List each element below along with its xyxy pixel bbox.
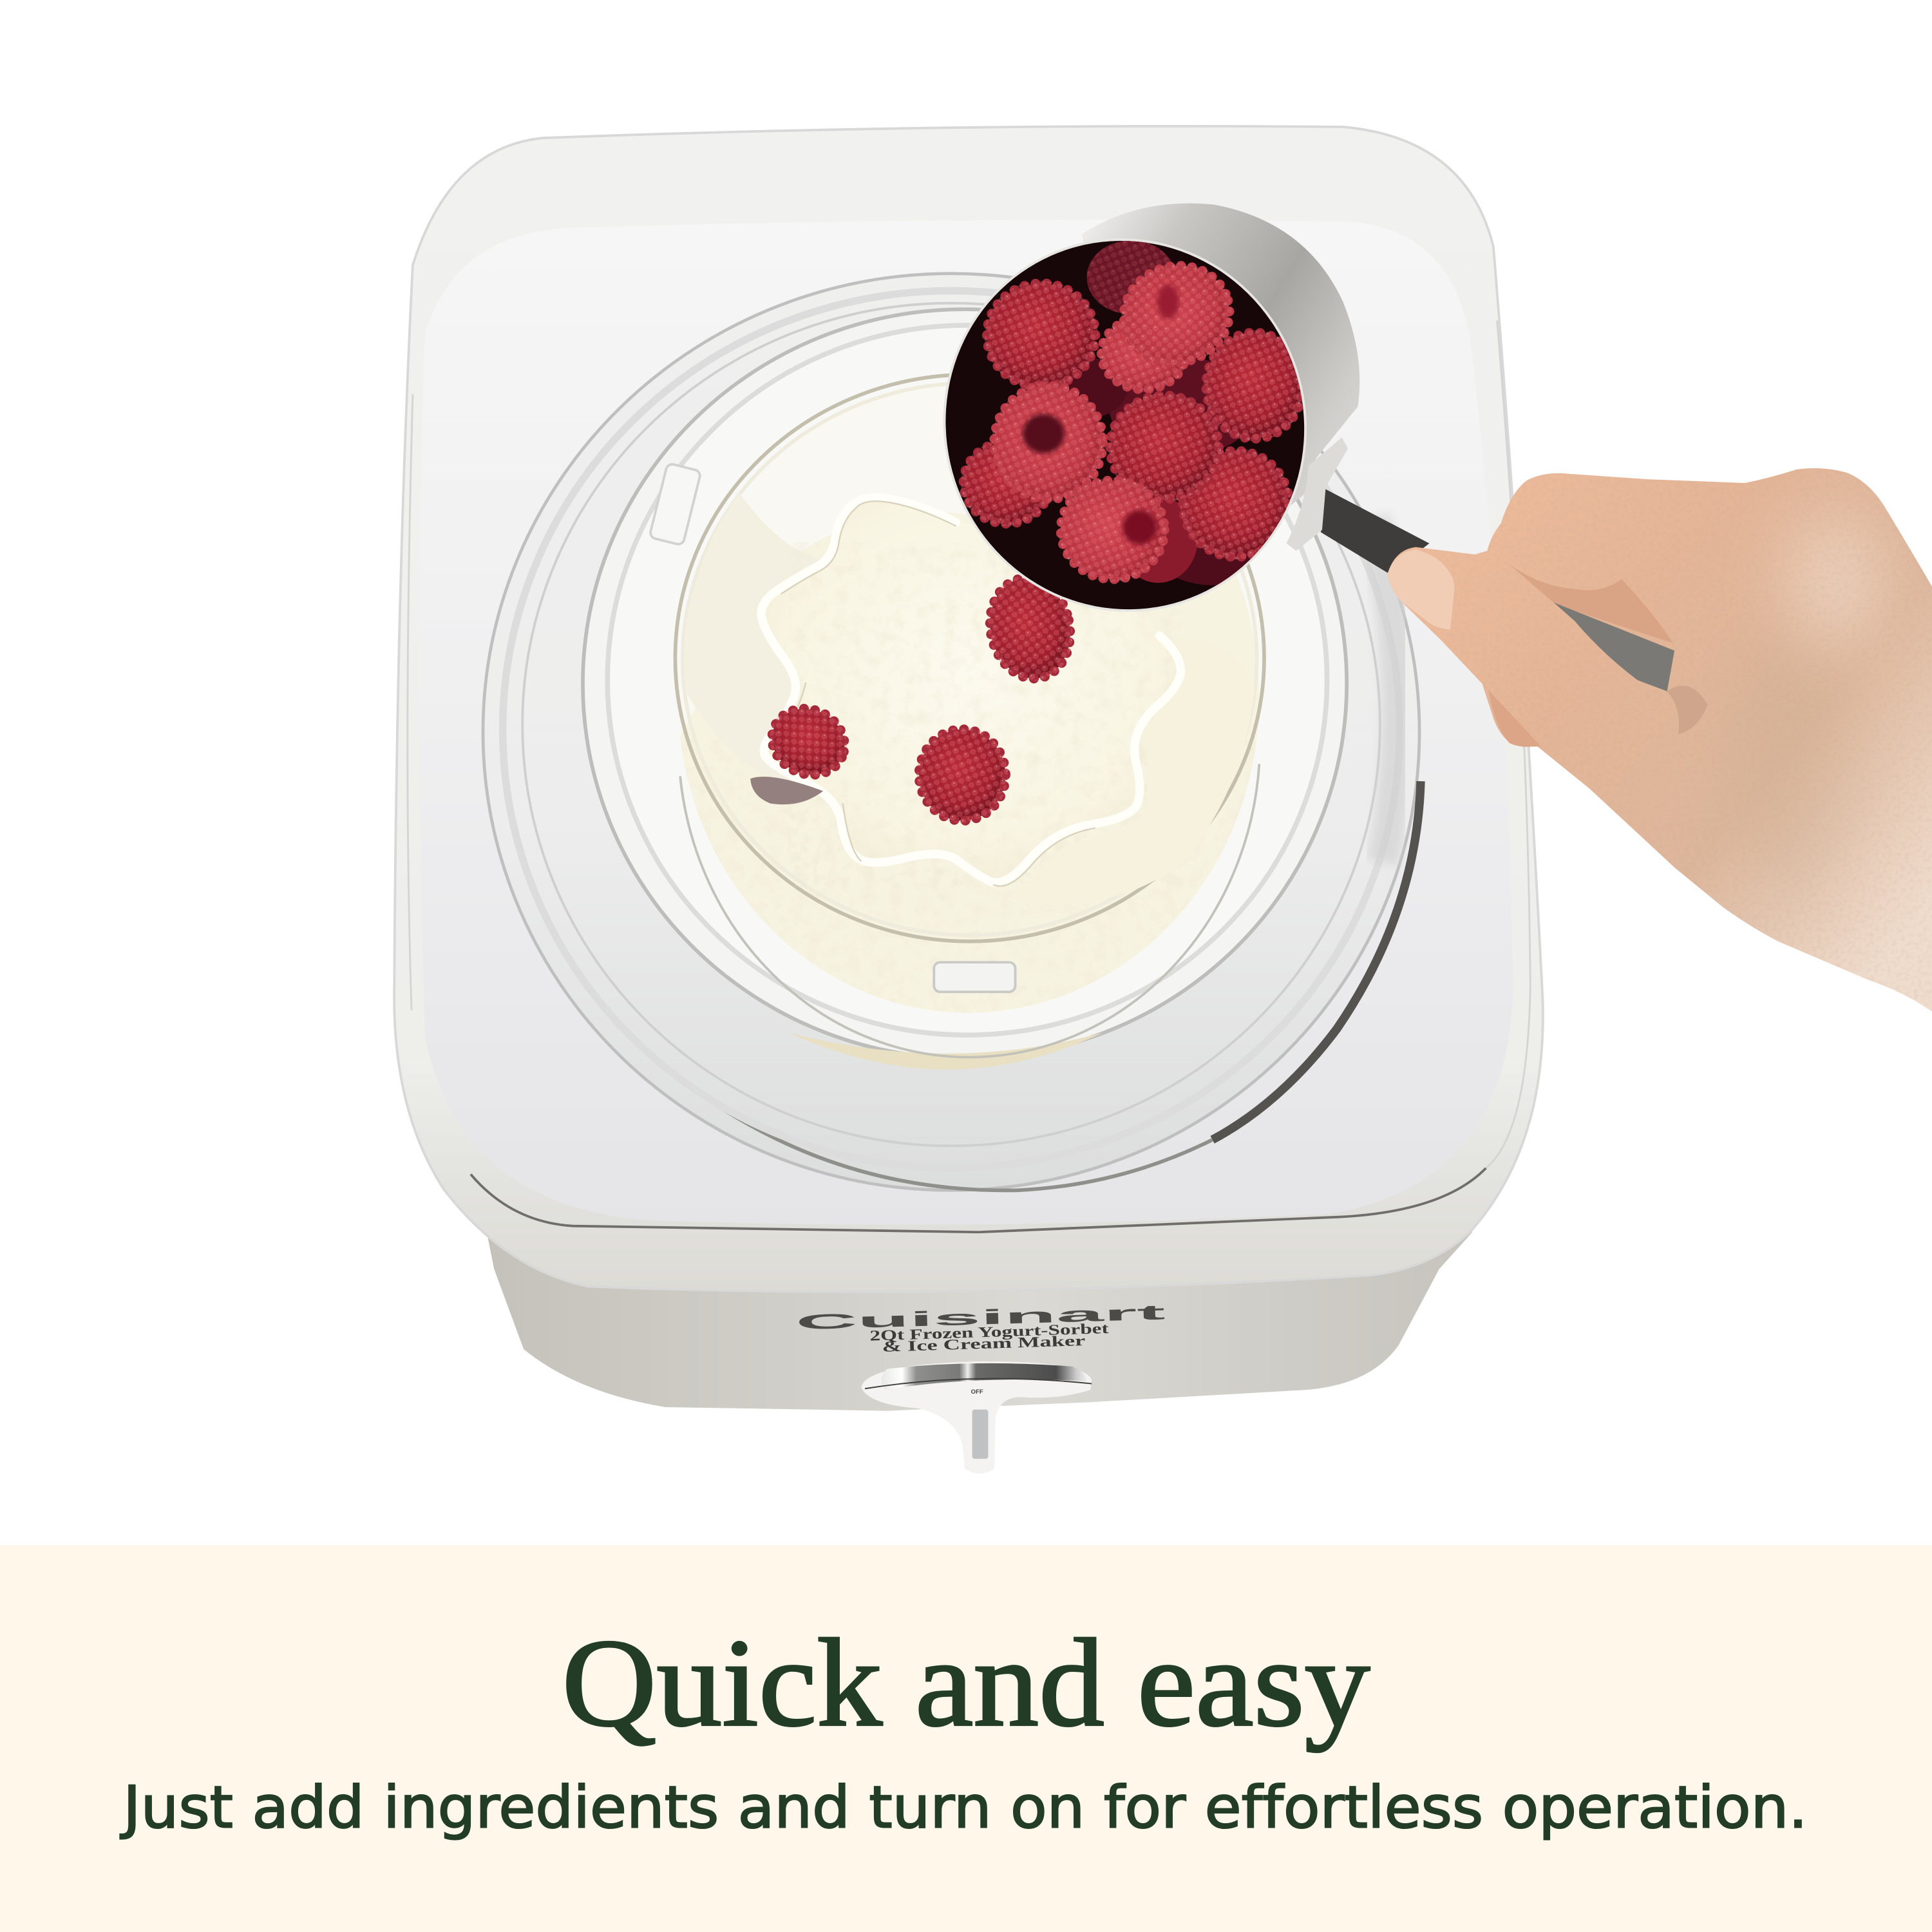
inner bowl — [649, 370, 1282, 1057]
ice cream lower layer — [677, 382, 1259, 1013]
right side ice cream under glass — [1010, 639, 1255, 904]
skin shading and highlights — [1380, 468, 1932, 1023]
raspberry left top — [985, 281, 1098, 390]
raspberry top hollow — [1119, 261, 1235, 367]
raspberry bottom back — [1139, 498, 1197, 583]
raspberry front hollow — [992, 383, 1105, 502]
fallen raspberries — [758, 568, 1082, 823]
machine body — [487, 1232, 1472, 1411]
bowl interior left glass — [685, 493, 839, 800]
product name — [869, 1320, 1109, 1355]
bowl front rim — [680, 764, 1259, 1057]
lid outer clear rim — [394, 126, 1543, 1292]
raspberry lower right — [1180, 448, 1291, 560]
palm and fingers — [1387, 468, 1932, 1012]
ice cream texture — [798, 542, 1088, 764]
product name: 2Qt Frozen Yogurt-Sorbet — [869, 1320, 1109, 1344]
thumb web shadow — [1667, 686, 1708, 734]
raspberry right — [1204, 330, 1305, 441]
bottom banner — [0, 1545, 1932, 1932]
subtitle: Just add ingredients and turn on for effortless operation. — [120, 1774, 1808, 1841]
ice cream scoop — [761, 498, 1181, 882]
cup handle between fingers — [1554, 603, 1674, 691]
raspberry back — [1087, 240, 1175, 314]
raspberry low left — [961, 440, 1052, 526]
raspberry center — [1108, 393, 1221, 502]
brand logo: Cuisinart — [795, 1300, 1166, 1334]
glass reflection right — [1374, 518, 1397, 862]
raspberry middle back — [1099, 316, 1188, 392]
cream sliver under ring — [788, 1032, 1103, 1070]
dark crescent — [1213, 781, 1421, 1140]
title: Quick and easy — [562, 1614, 1370, 1753]
dial knob — [861, 1361, 1092, 1473]
cup exterior steel wall — [1082, 204, 1359, 604]
outer bowl ring — [483, 274, 1421, 1190]
hand holding the cup — [1380, 468, 1932, 1023]
raspberries in cup — [961, 240, 1305, 585]
ice cream maker appliance — [394, 126, 1543, 1473]
bowl tab: bottom — [934, 962, 1016, 992]
lid top panel — [419, 220, 1513, 1225]
mixing paddle wavy edge — [761, 498, 1181, 882]
OFF label: OFF — [971, 1388, 983, 1396]
lid front dark seal line — [471, 1168, 1486, 1232]
white patch lower right — [1109, 788, 1269, 1010]
cup handle — [1286, 437, 1429, 574]
clear bowl wall — [675, 375, 1264, 942]
raspberry bottom hollow — [1058, 478, 1167, 582]
top of bowl, translucent white — [678, 386, 967, 736]
dark reflection — [750, 777, 823, 804]
raspberry: ice cream left — [758, 694, 858, 790]
cup rim and interior — [895, 191, 1355, 659]
shadow between finger and thumb — [1510, 564, 1673, 643]
product name: & Ice Cream Maker — [882, 1332, 1086, 1355]
back filler berries — [1110, 358, 1240, 448]
measuring cup with raspberries — [943, 204, 1430, 612]
fingernail — [1387, 549, 1454, 630]
bowl tab: left — [649, 463, 701, 545]
middle finger tip behind thumb — [1488, 690, 1540, 747]
raspberry: ice cream center — [916, 727, 1008, 823]
lid side edge lines — [408, 320, 1530, 1168]
raspberry: ice cream upper — [978, 568, 1082, 689]
